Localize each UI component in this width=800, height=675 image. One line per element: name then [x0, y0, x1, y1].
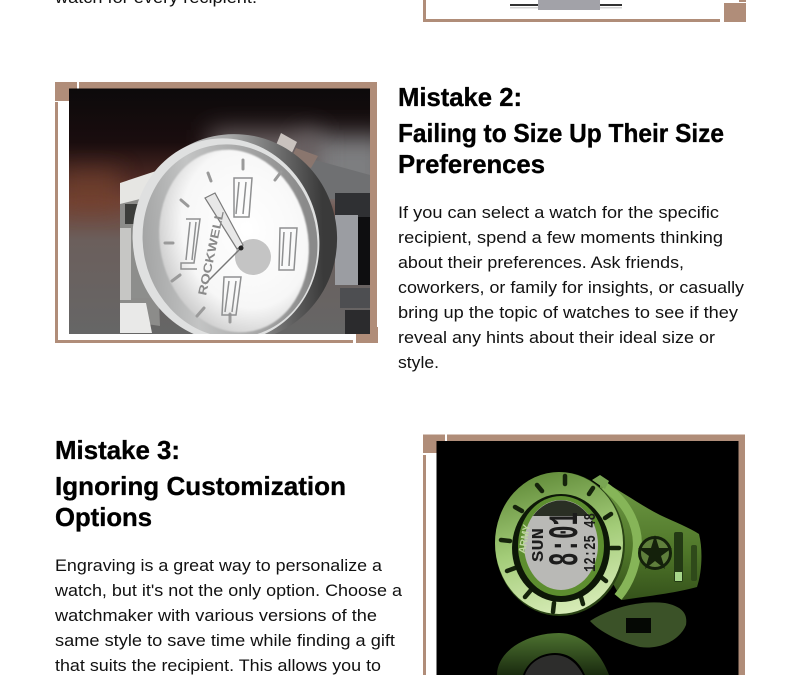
heading: mistake 3: Mistake 3: — [55, 435, 180, 465]
watch clasp — [510, 0, 622, 10]
text block: mistake 3 — [54, 556, 403, 675]
text block: mistake 3: Engraving is a great way to personalize a — [55, 556, 383, 575]
heading: mistake 2: Mistake 2: — [398, 82, 522, 112]
bezel text: ARMY — [517, 523, 533, 555]
text block: mistake 2: coworkers, or family for insights, or casually — [398, 278, 745, 297]
watch dial — [142, 136, 326, 346]
watch case — [114, 115, 356, 361]
green watch photo — [436, 441, 738, 675]
text block: mistake 2: reveal any hints about their ideal size or — [398, 328, 715, 347]
text block: mistake 2: If you can select a watch for the specific — [398, 203, 720, 222]
LCD readout: 8:01 — [542, 512, 590, 566]
heading: mistake 2 — [398, 82, 724, 179]
image frame: mistake 3 green watch — [423, 434, 745, 675]
heading: mistake 3: Options — [55, 502, 152, 532]
strap — [592, 475, 701, 600]
text block: mistake 3: watch, but it's not the only option. Choose a — [54, 581, 403, 600]
frame border — [55, 82, 378, 343]
left bracelet — [120, 171, 160, 333]
heading: mistake 2: Preferences — [398, 149, 545, 179]
reflection — [497, 602, 686, 675]
text block: mistake 3: that suits the recipient. This allows you to — [55, 656, 381, 675]
text block: mistake 2: style. — [398, 353, 439, 372]
image frame: mistake 2 silver watch — [55, 82, 390, 361]
bezel notches — [501, 476, 619, 612]
text block: mistake 2: recipient, spend a few moments thinking — [398, 228, 723, 247]
right bracelet — [274, 133, 370, 335]
bezel — [495, 472, 625, 616]
LCD readout: SUN — [530, 528, 549, 562]
brand name: ROCKWELL — [195, 210, 227, 297]
hour markers — [165, 160, 281, 322]
heading: mistake 3 — [55, 435, 346, 532]
heading: mistake 3: Ignoring Customization — [55, 471, 346, 501]
frame border — [423, 434, 745, 675]
text block: mistake 3: watchmaker with various versions of the — [54, 606, 377, 625]
text block: mistake 2: about their preferences. Ask friends, — [398, 253, 684, 272]
heading: mistake 2: Failing to Size Up Their Size — [398, 118, 724, 148]
text block: mistake 3: same style to save time while finding a gift — [55, 631, 395, 650]
LCD readout — [530, 512, 601, 572]
LCD readout: 12:25 48 — [582, 513, 601, 572]
silver watch photo — [69, 88, 370, 334]
numerals — [181, 178, 297, 315]
text block: mistake 2: bring up the topic of watches to see if they — [398, 303, 739, 322]
LCD screen — [524, 500, 598, 590]
hands and subdial — [205, 193, 271, 284]
text block: mistake 2 — [398, 203, 745, 372]
image frame: mistake 1 watch clasp — [423, 0, 746, 22]
